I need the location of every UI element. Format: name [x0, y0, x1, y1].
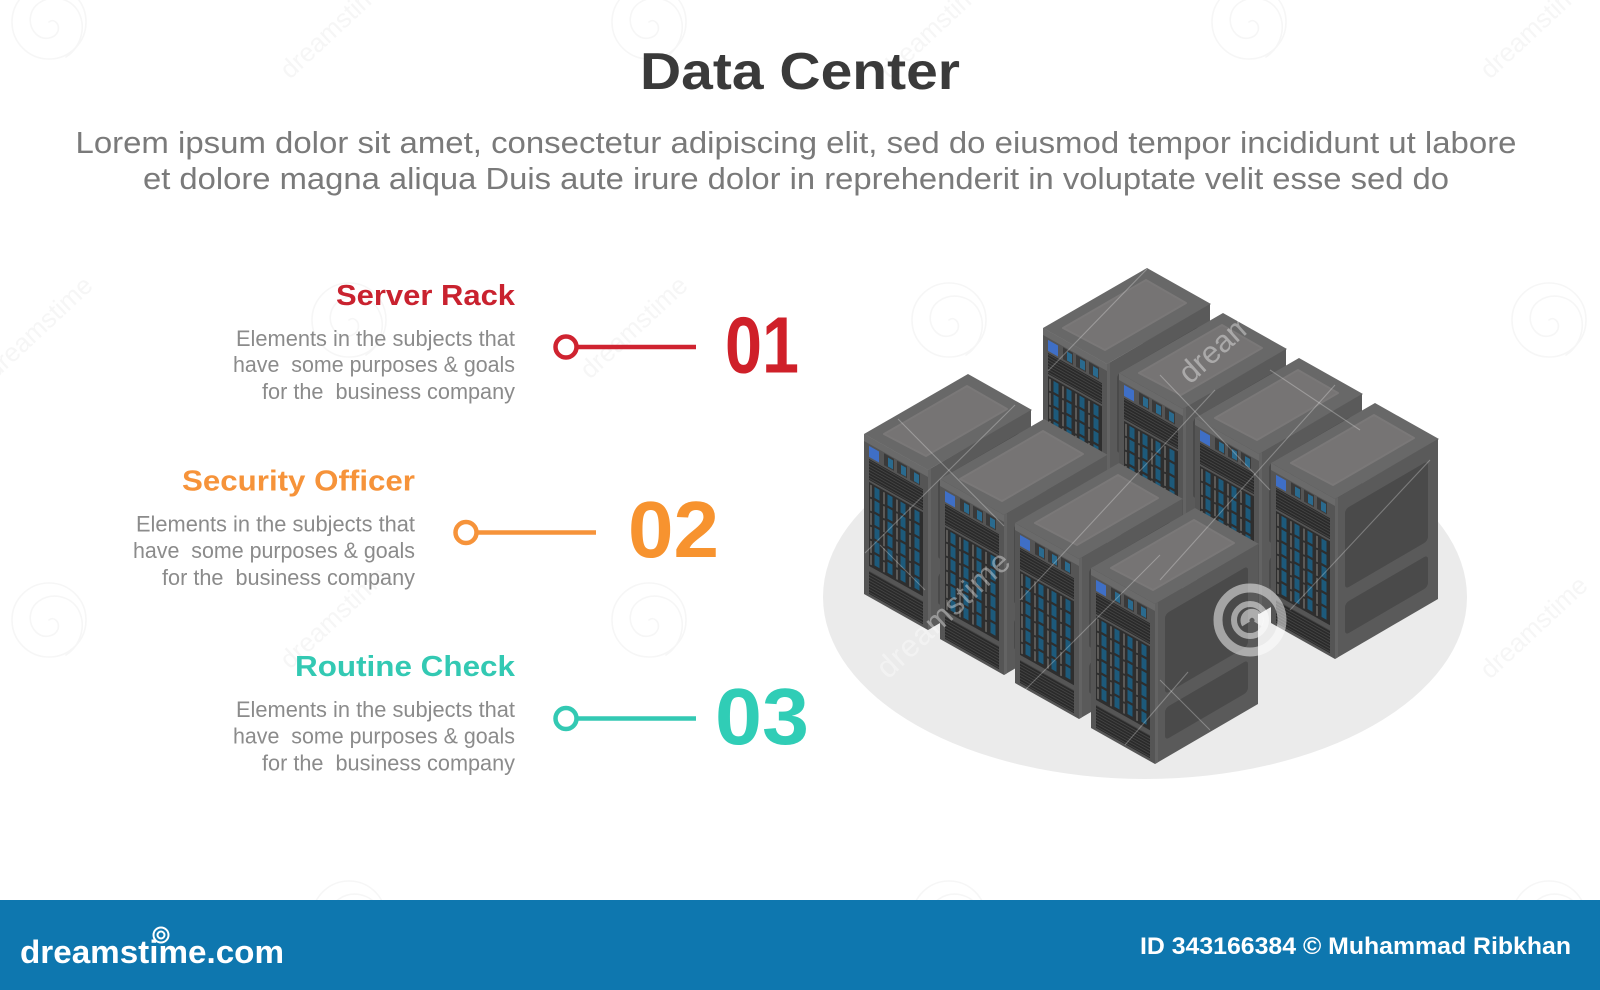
watermark spiral [1218, 588, 1282, 652]
subtitle: Lorem ipsum dolor sit amet, consectetur adipiscing elit, sed do eiusmod tempor incididunt ut labore [76, 125, 1516, 160]
server racks [864, 268, 1439, 764]
watermark text: dreamstime [574, 270, 693, 384]
subtitle [76, 125, 1516, 196]
footer logo [20, 928, 284, 970]
description 03: Elements in the subjects that [236, 697, 516, 722]
description 02 [133, 512, 416, 590]
description 01 [233, 326, 516, 404]
watermark text [0, 0, 1593, 684]
description 03 [233, 697, 516, 776]
description 03: for the business company [262, 750, 516, 776]
heading: Server Rack: Server Rack [336, 280, 516, 312]
number 01: 01 [725, 300, 799, 390]
logo wordmark: dreamstime.com [20, 934, 284, 970]
item 03: Routine Check [233, 651, 809, 776]
number 02: 02 [628, 485, 719, 574]
connector 03 [556, 708, 696, 729]
floor ellipse [823, 415, 1467, 779]
description 03: have some purposes & goals [233, 724, 515, 748]
watermark wordmarks [869, 305, 1260, 685]
description 01: have some purposes & goals [233, 352, 515, 377]
watermark text: dreamstime [1474, 570, 1593, 684]
description 02: for the business company [162, 565, 416, 590]
footer credit: ID 343166384 © Muhammad Ribkhan [1140, 933, 1571, 960]
heading: Security Officer: Security Officer [182, 466, 415, 498]
isometric server room illustration [823, 268, 1467, 779]
footer band [0, 900, 1600, 990]
heading: Routine Check: Routine Check [295, 651, 516, 683]
watermark overlay [865, 269, 1430, 745]
description 02: have some purposes & goals [133, 538, 415, 563]
connector 02 [456, 522, 596, 543]
watermark wordmarks: dream [1171, 305, 1260, 390]
description 01: for the business company [262, 379, 516, 404]
logo spiral [154, 928, 168, 942]
subtitle: et dolore magna aliqua Duis aute irure dolor in reprehenderit in voluptate velit esse sed do [143, 161, 1449, 196]
item 02: Security Officer [133, 466, 719, 590]
item 01: Server Rack [233, 280, 799, 404]
title: Data Center [640, 43, 960, 101]
number 03: 03 [715, 672, 809, 761]
watermark wordmarks: dreamstime [869, 544, 1017, 685]
connector 01 [556, 336, 696, 358]
description 01: Elements in the subjects that [236, 326, 516, 351]
description 02: Elements in the subjects that [136, 512, 416, 536]
watermark text: dreamstime [274, 560, 393, 674]
